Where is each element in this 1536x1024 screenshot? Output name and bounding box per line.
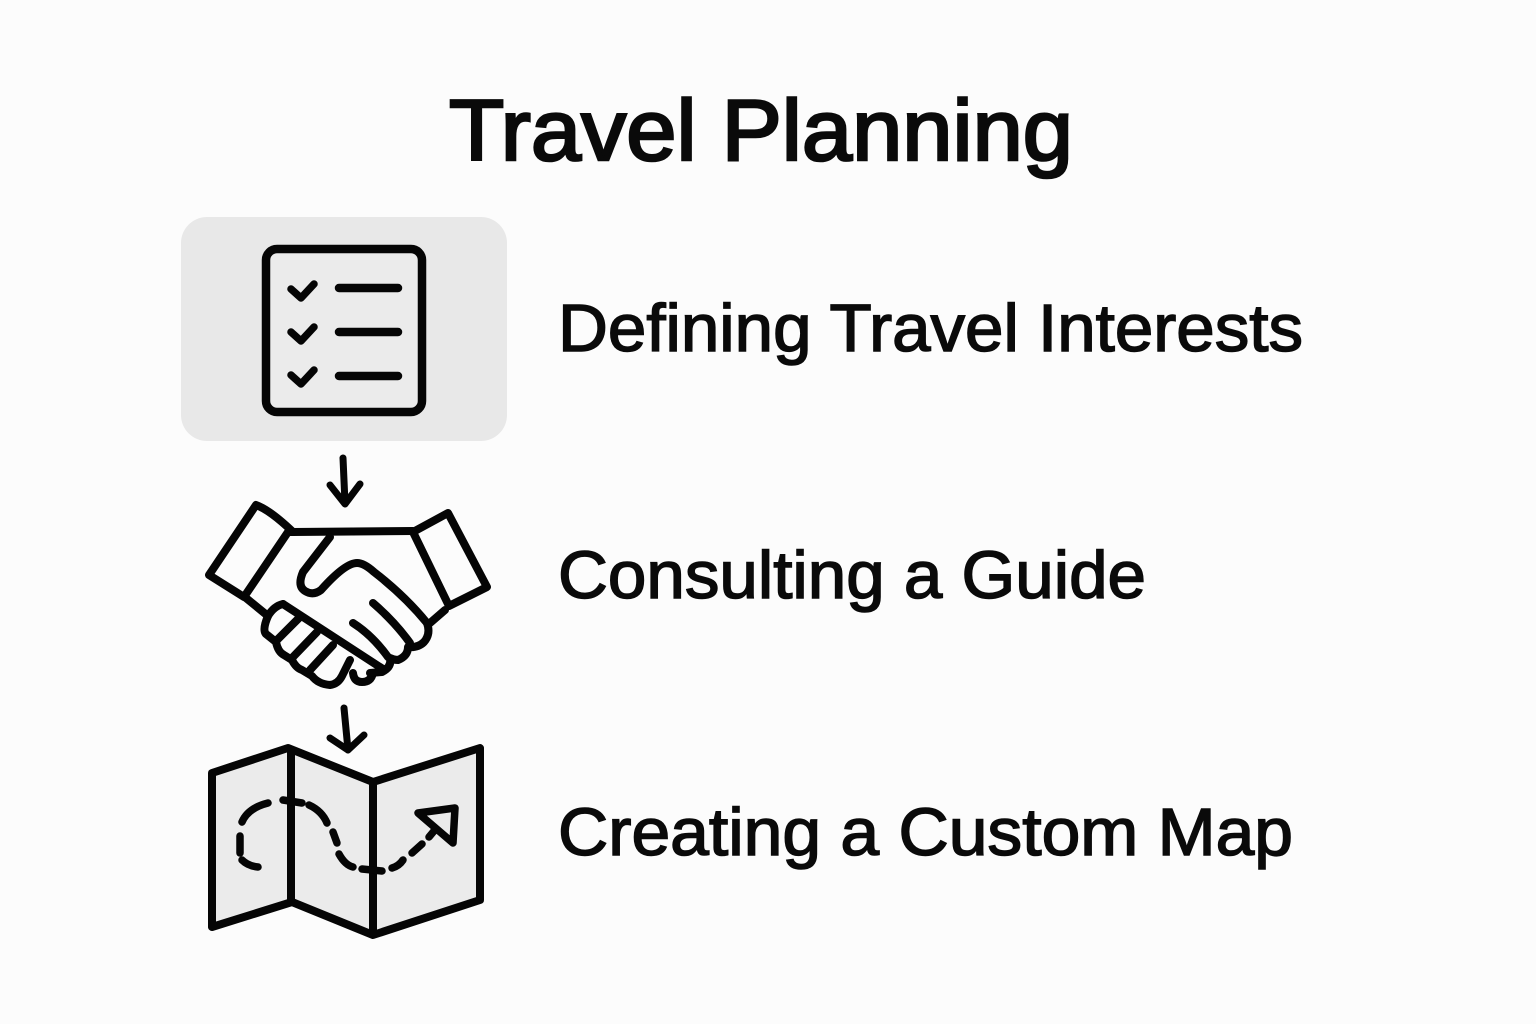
route: dashed path <box>240 800 455 871</box>
right fingers outline <box>370 623 428 673</box>
icon: handshake <box>209 505 487 685</box>
left cuff <box>209 505 293 597</box>
left fingers outline <box>264 604 350 685</box>
icon: folded map <box>212 748 480 935</box>
wrists <box>246 598 445 623</box>
upper hand and thumb <box>300 537 427 623</box>
panel: step 1 icon tile <box>181 217 507 441</box>
step 1 label: Defining Travel Interests <box>558 291 1303 366</box>
lower hand edge <box>283 604 383 669</box>
right cuff <box>413 513 487 606</box>
finger separators <box>277 617 333 670</box>
arrow: step 1 to step 2 <box>330 458 360 504</box>
step 2 label: Consulting a Guide <box>558 538 1146 613</box>
step 3 label: Creating a Custom Map <box>558 795 1293 870</box>
right finger lines <box>353 603 410 657</box>
top edge <box>293 531 413 532</box>
arrow: step 2 to step 3 <box>330 708 364 750</box>
icon: checklist <box>266 249 422 412</box>
small hook <box>353 673 373 682</box>
title: Travel Planning <box>449 83 1073 179</box>
